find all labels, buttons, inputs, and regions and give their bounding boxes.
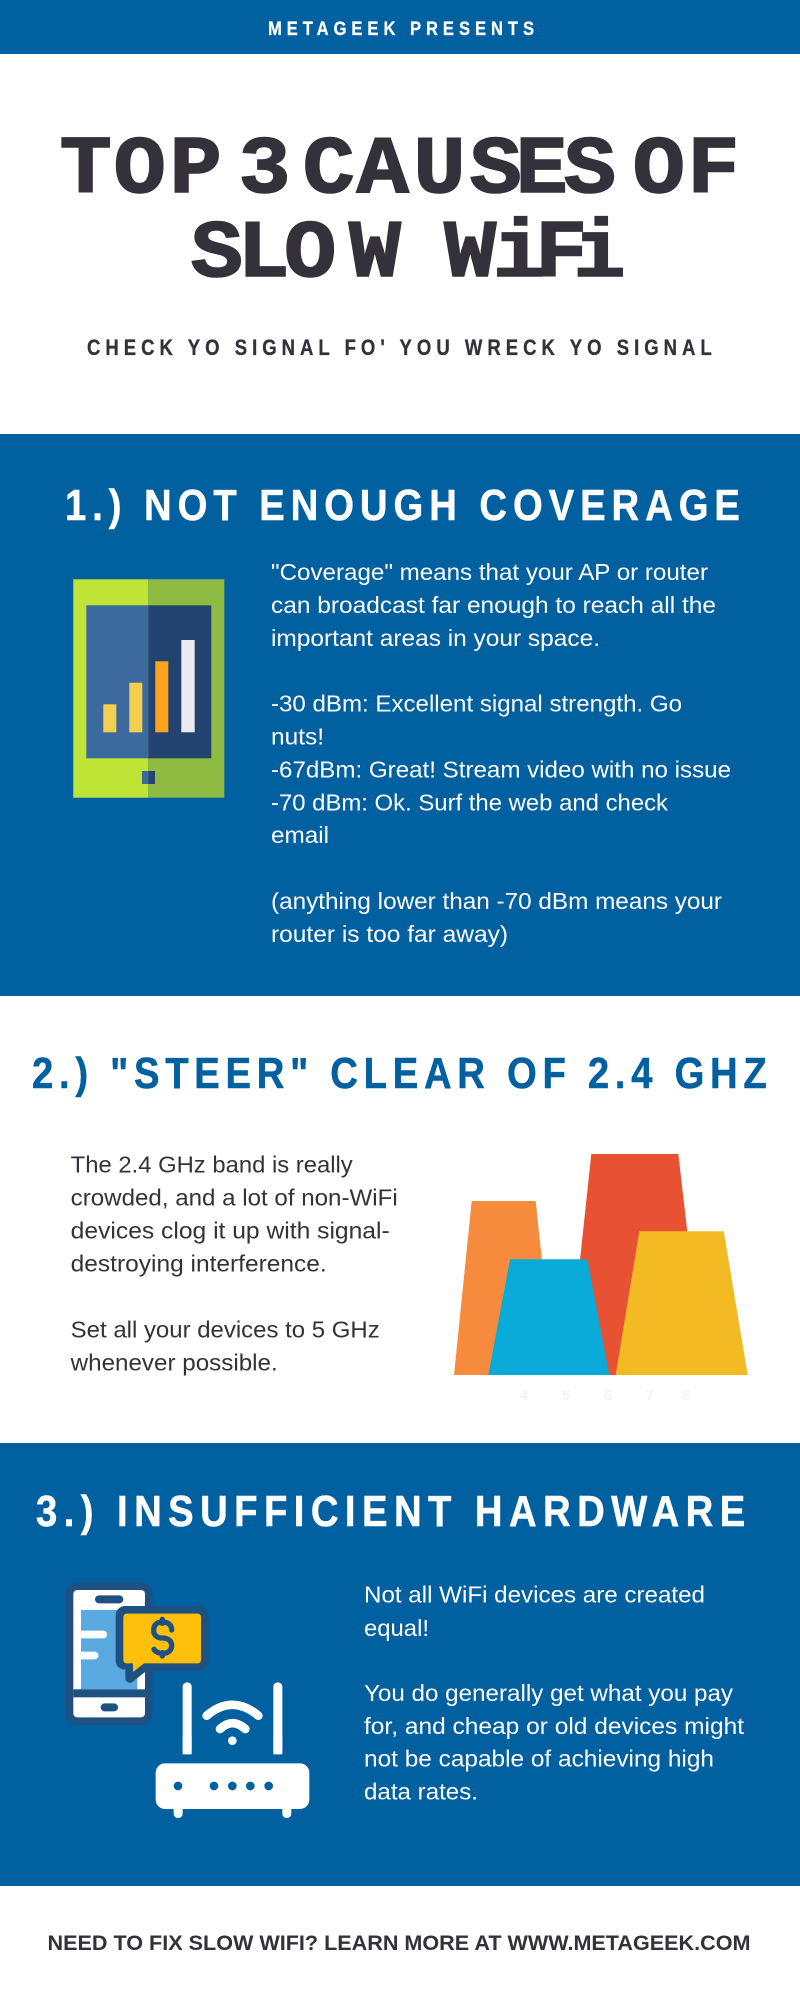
header text: METAGEEK PRESENTS bbox=[268, 18, 534, 39]
text: hardware explanation: not be capable of achieving high bbox=[364, 1746, 714, 1772]
text: 2.4 GHz explanation bbox=[70, 1152, 398, 1375]
chart: overlapping channel trapezoids bbox=[454, 1154, 748, 1404]
chart: overlapping channel trapezoids: 4 bbox=[520, 1387, 529, 1404]
text: coverage explanation: email bbox=[271, 822, 329, 848]
chart: overlapping channel trapezoids: 6 bbox=[604, 1387, 612, 1404]
text: hardware explanation: equal! bbox=[364, 1615, 429, 1641]
title: TOP 3 CAUSES OF bbox=[60, 125, 740, 217]
heading: section 1: 1.) NOT ENOUGH COVERAGE bbox=[65, 481, 740, 530]
subtitle: CHECK YO SIGNAL FO' YOU WRECK YO SIGNAL bbox=[87, 337, 712, 360]
panel: steer clear of 2.4 GHz bbox=[32, 1049, 767, 1404]
text: coverage explanation: "Coverage" means that your AP or router bbox=[271, 559, 708, 585]
title bbox=[60, 125, 740, 301]
text: hardware explanation bbox=[364, 1582, 744, 1804]
text: hardware explanation: Not all WiFi devices are created bbox=[364, 1582, 705, 1608]
text: coverage explanation: important areas in your space. bbox=[271, 625, 600, 651]
header banner bbox=[0, 0, 800, 54]
chart: overlapping channel trapezoids: 5 bbox=[562, 1387, 570, 1404]
panel: not enough coverage bbox=[0, 434, 800, 996]
text: coverage explanation: (anything lower than -70 dBm means your bbox=[271, 888, 722, 914]
chart: overlapping channel trapezoids: 7 bbox=[646, 1387, 654, 1404]
text: coverage explanation: -67dBm: Great! Stream video with no issue bbox=[271, 756, 731, 782]
text: 2.4 GHz explanation: Set all your devices to 5 GHz bbox=[71, 1316, 380, 1342]
panel: insufficient hardware bbox=[0, 1443, 800, 1886]
text: 2.4 GHz explanation: destroying interference. bbox=[71, 1250, 327, 1276]
text: coverage explanation bbox=[271, 559, 731, 947]
text: 2.4 GHz explanation: The 2.4 GHz band is really bbox=[71, 1152, 353, 1178]
text: coverage explanation: nuts! bbox=[271, 724, 324, 750]
text: 2.4 GHz explanation: devices clog it up with signal- bbox=[71, 1218, 390, 1244]
text: hardware explanation: data rates. bbox=[364, 1778, 478, 1804]
chart: overlapping channel trapezoids: 8 bbox=[682, 1387, 690, 1404]
text: 2.4 GHz explanation: crowded, and a lot of non-WiFi bbox=[71, 1185, 398, 1211]
heading: section 3: 3.) INSUFFICIENT HARDWARE bbox=[36, 1487, 745, 1536]
text: 2.4 GHz explanation: whenever possible. bbox=[70, 1349, 278, 1375]
text: coverage explanation: router is too far away) bbox=[271, 921, 508, 947]
text: hardware explanation: for, and cheap or old devices might bbox=[364, 1713, 744, 1739]
footer call to action: NEED TO FIX SLOW WIFI? LEARN MORE AT WWW.METAGEEK.COM bbox=[48, 1931, 750, 1955]
icon: tablet with signal bars bbox=[73, 579, 224, 798]
heading: section 2: 2.) "STEER" CLEAR OF 2.4 GHZ bbox=[32, 1049, 767, 1098]
text: hardware explanation: You do generally get what you pay bbox=[364, 1680, 733, 1706]
title: SLOW WiFi bbox=[191, 209, 626, 301]
icon: phone with price bubble and router bbox=[66, 1582, 309, 1818]
text: coverage explanation: -70 dBm: Ok. Surf the web and check bbox=[271, 789, 668, 815]
text: coverage explanation: can broadcast far enough to reach all the bbox=[271, 592, 716, 618]
text: coverage explanation: -30 dBm: Excellent signal strength. Go bbox=[271, 691, 682, 717]
